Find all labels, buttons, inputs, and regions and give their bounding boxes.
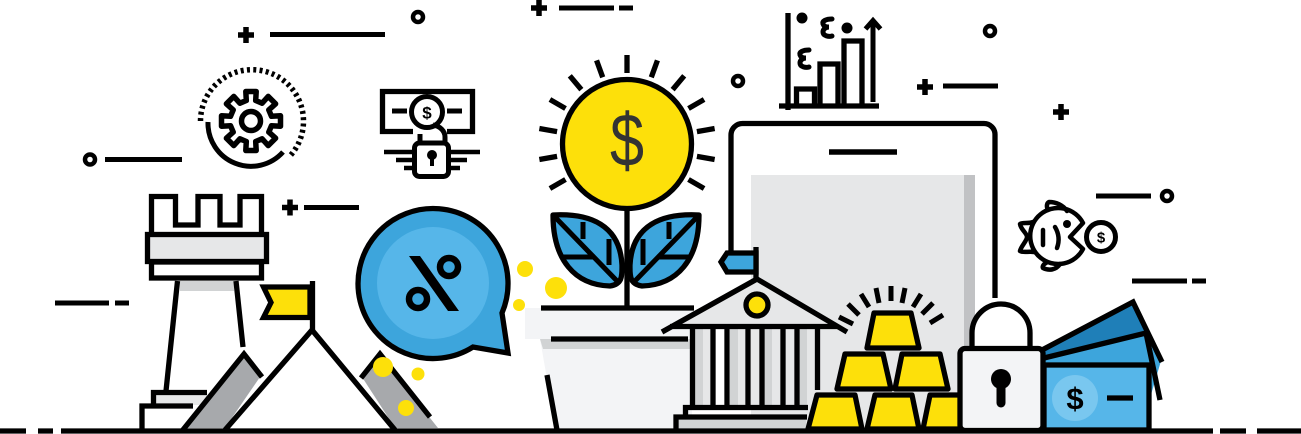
icon: banknote with padlock xyxy=(382,92,480,176)
icon: rook chess tower xyxy=(142,196,266,431)
icon: percent speech bubble xyxy=(358,209,508,359)
plant pot xyxy=(525,308,694,430)
leaf: left xyxy=(553,215,622,286)
sun rays xyxy=(539,55,715,188)
coin flower xyxy=(562,80,692,208)
icon: stacked gold bars xyxy=(808,286,965,429)
decorative plus signs, lines and small circles xyxy=(55,0,1206,303)
icon: fish eating coin xyxy=(1020,202,1116,270)
leaf: right xyxy=(630,215,699,286)
icon: bar chart with arrow xyxy=(779,12,880,110)
money plant with coin flower xyxy=(539,55,715,308)
yellow coin dots xyxy=(373,261,567,416)
icon: banknote with padlock: $ xyxy=(422,104,432,122)
icon: phone frame with screen xyxy=(731,124,995,429)
icon: padlock xyxy=(960,304,1043,430)
icon: mountain with flag xyxy=(182,281,438,431)
icon: cash fan xyxy=(1042,302,1162,430)
dollar sign: $ xyxy=(610,98,644,182)
icon: gear with dotted orbit xyxy=(200,70,303,166)
icon: cash fan: $ xyxy=(1066,381,1084,416)
icon: bank building xyxy=(662,247,847,430)
ground line xyxy=(0,428,1301,434)
icon: fish eating coin: $ xyxy=(1097,230,1106,246)
